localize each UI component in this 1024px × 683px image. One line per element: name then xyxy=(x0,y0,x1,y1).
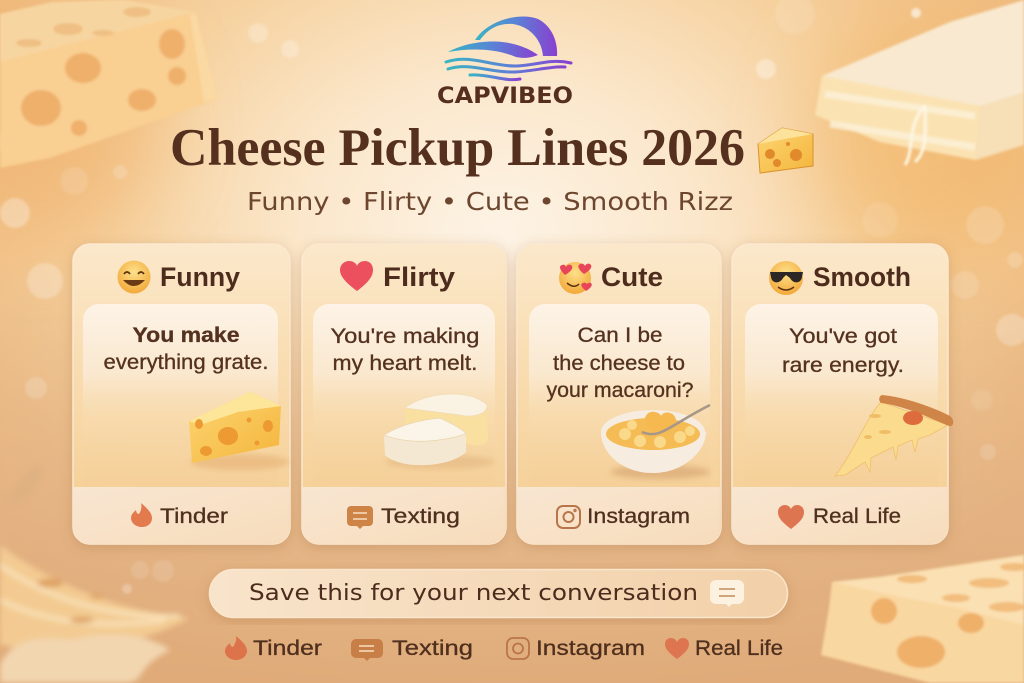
quote xyxy=(782,325,904,377)
icon: pizza slice xyxy=(835,395,953,476)
platform label: Instagram xyxy=(587,505,690,528)
heading: Cute xyxy=(601,262,663,292)
icon: chat bubble xyxy=(710,580,744,607)
icon: flame xyxy=(225,636,247,660)
label: real life: Real Life xyxy=(695,637,783,660)
cheese swirl: bottom left xyxy=(0,465,190,683)
label: texting: Texting xyxy=(392,637,473,660)
icon: brie cheese xyxy=(384,394,495,469)
footer xyxy=(732,487,948,544)
label: instagram: Instagram xyxy=(536,637,645,660)
cheese block: bottom right xyxy=(821,555,1024,683)
quote panel xyxy=(745,304,938,487)
heading: Smooth xyxy=(813,262,911,292)
legend: platforms xyxy=(225,636,783,661)
footer xyxy=(302,487,506,544)
title: Cheese Pickup Lines 2026 xyxy=(170,119,745,177)
logo cap mark xyxy=(446,17,571,80)
quote panel xyxy=(529,304,710,487)
subtitle: Funny • Flirty • Cute • Smooth Rizz xyxy=(247,187,733,216)
callout: save this xyxy=(210,570,788,618)
icon: cheese wedge xyxy=(189,392,290,470)
logo: CAPVIBEO xyxy=(437,17,573,109)
quote: everything grate. xyxy=(104,351,268,374)
callout text: Save this for your next conversation xyxy=(249,581,698,606)
icon: instagram xyxy=(507,638,529,659)
icon: chat bubble xyxy=(351,639,383,661)
heading: Funny xyxy=(160,262,240,292)
platform label: Texting xyxy=(381,505,460,528)
quote xyxy=(546,324,694,402)
icon: instagram xyxy=(557,506,580,528)
quote: You're making xyxy=(330,325,480,348)
quote: You make xyxy=(132,324,240,347)
panel: flirty xyxy=(302,244,506,544)
quote: rare energy. xyxy=(782,354,904,377)
icon: flame xyxy=(131,503,152,527)
quote: You've got xyxy=(789,325,897,348)
label: tinder: Tinder xyxy=(253,637,322,660)
platform label: Real Life xyxy=(813,505,901,528)
footer xyxy=(517,487,721,544)
icon: chat bubble xyxy=(347,506,373,529)
panel: smooth xyxy=(732,244,953,544)
icon: cheese wedge title xyxy=(758,128,813,173)
icon: heart xyxy=(778,505,804,529)
icon: heart xyxy=(340,261,373,291)
quote: the cheese to xyxy=(553,352,685,375)
quote: Can I be xyxy=(578,324,662,347)
icon: sunglasses face xyxy=(769,261,803,295)
quote xyxy=(104,324,268,374)
brie block: top right xyxy=(815,0,1024,165)
quote xyxy=(330,325,480,375)
icon: heart eyes face xyxy=(559,262,592,294)
panel: cute xyxy=(517,244,721,544)
quote panel xyxy=(83,304,278,487)
icon: heart xyxy=(665,638,689,659)
footer xyxy=(73,487,290,544)
icon: macaroni bowl xyxy=(601,405,710,479)
icon: smiling face xyxy=(118,260,150,294)
panel: funny xyxy=(73,244,290,544)
cheese block: top left xyxy=(0,0,218,168)
heading: Flirty xyxy=(383,262,455,292)
platform label: Tinder xyxy=(160,505,228,528)
quote panel xyxy=(313,304,495,487)
quote: my heart melt. xyxy=(332,352,478,375)
quote: your macaroni? xyxy=(546,379,694,402)
logo wordmark: CAPVIBEO xyxy=(437,84,573,109)
